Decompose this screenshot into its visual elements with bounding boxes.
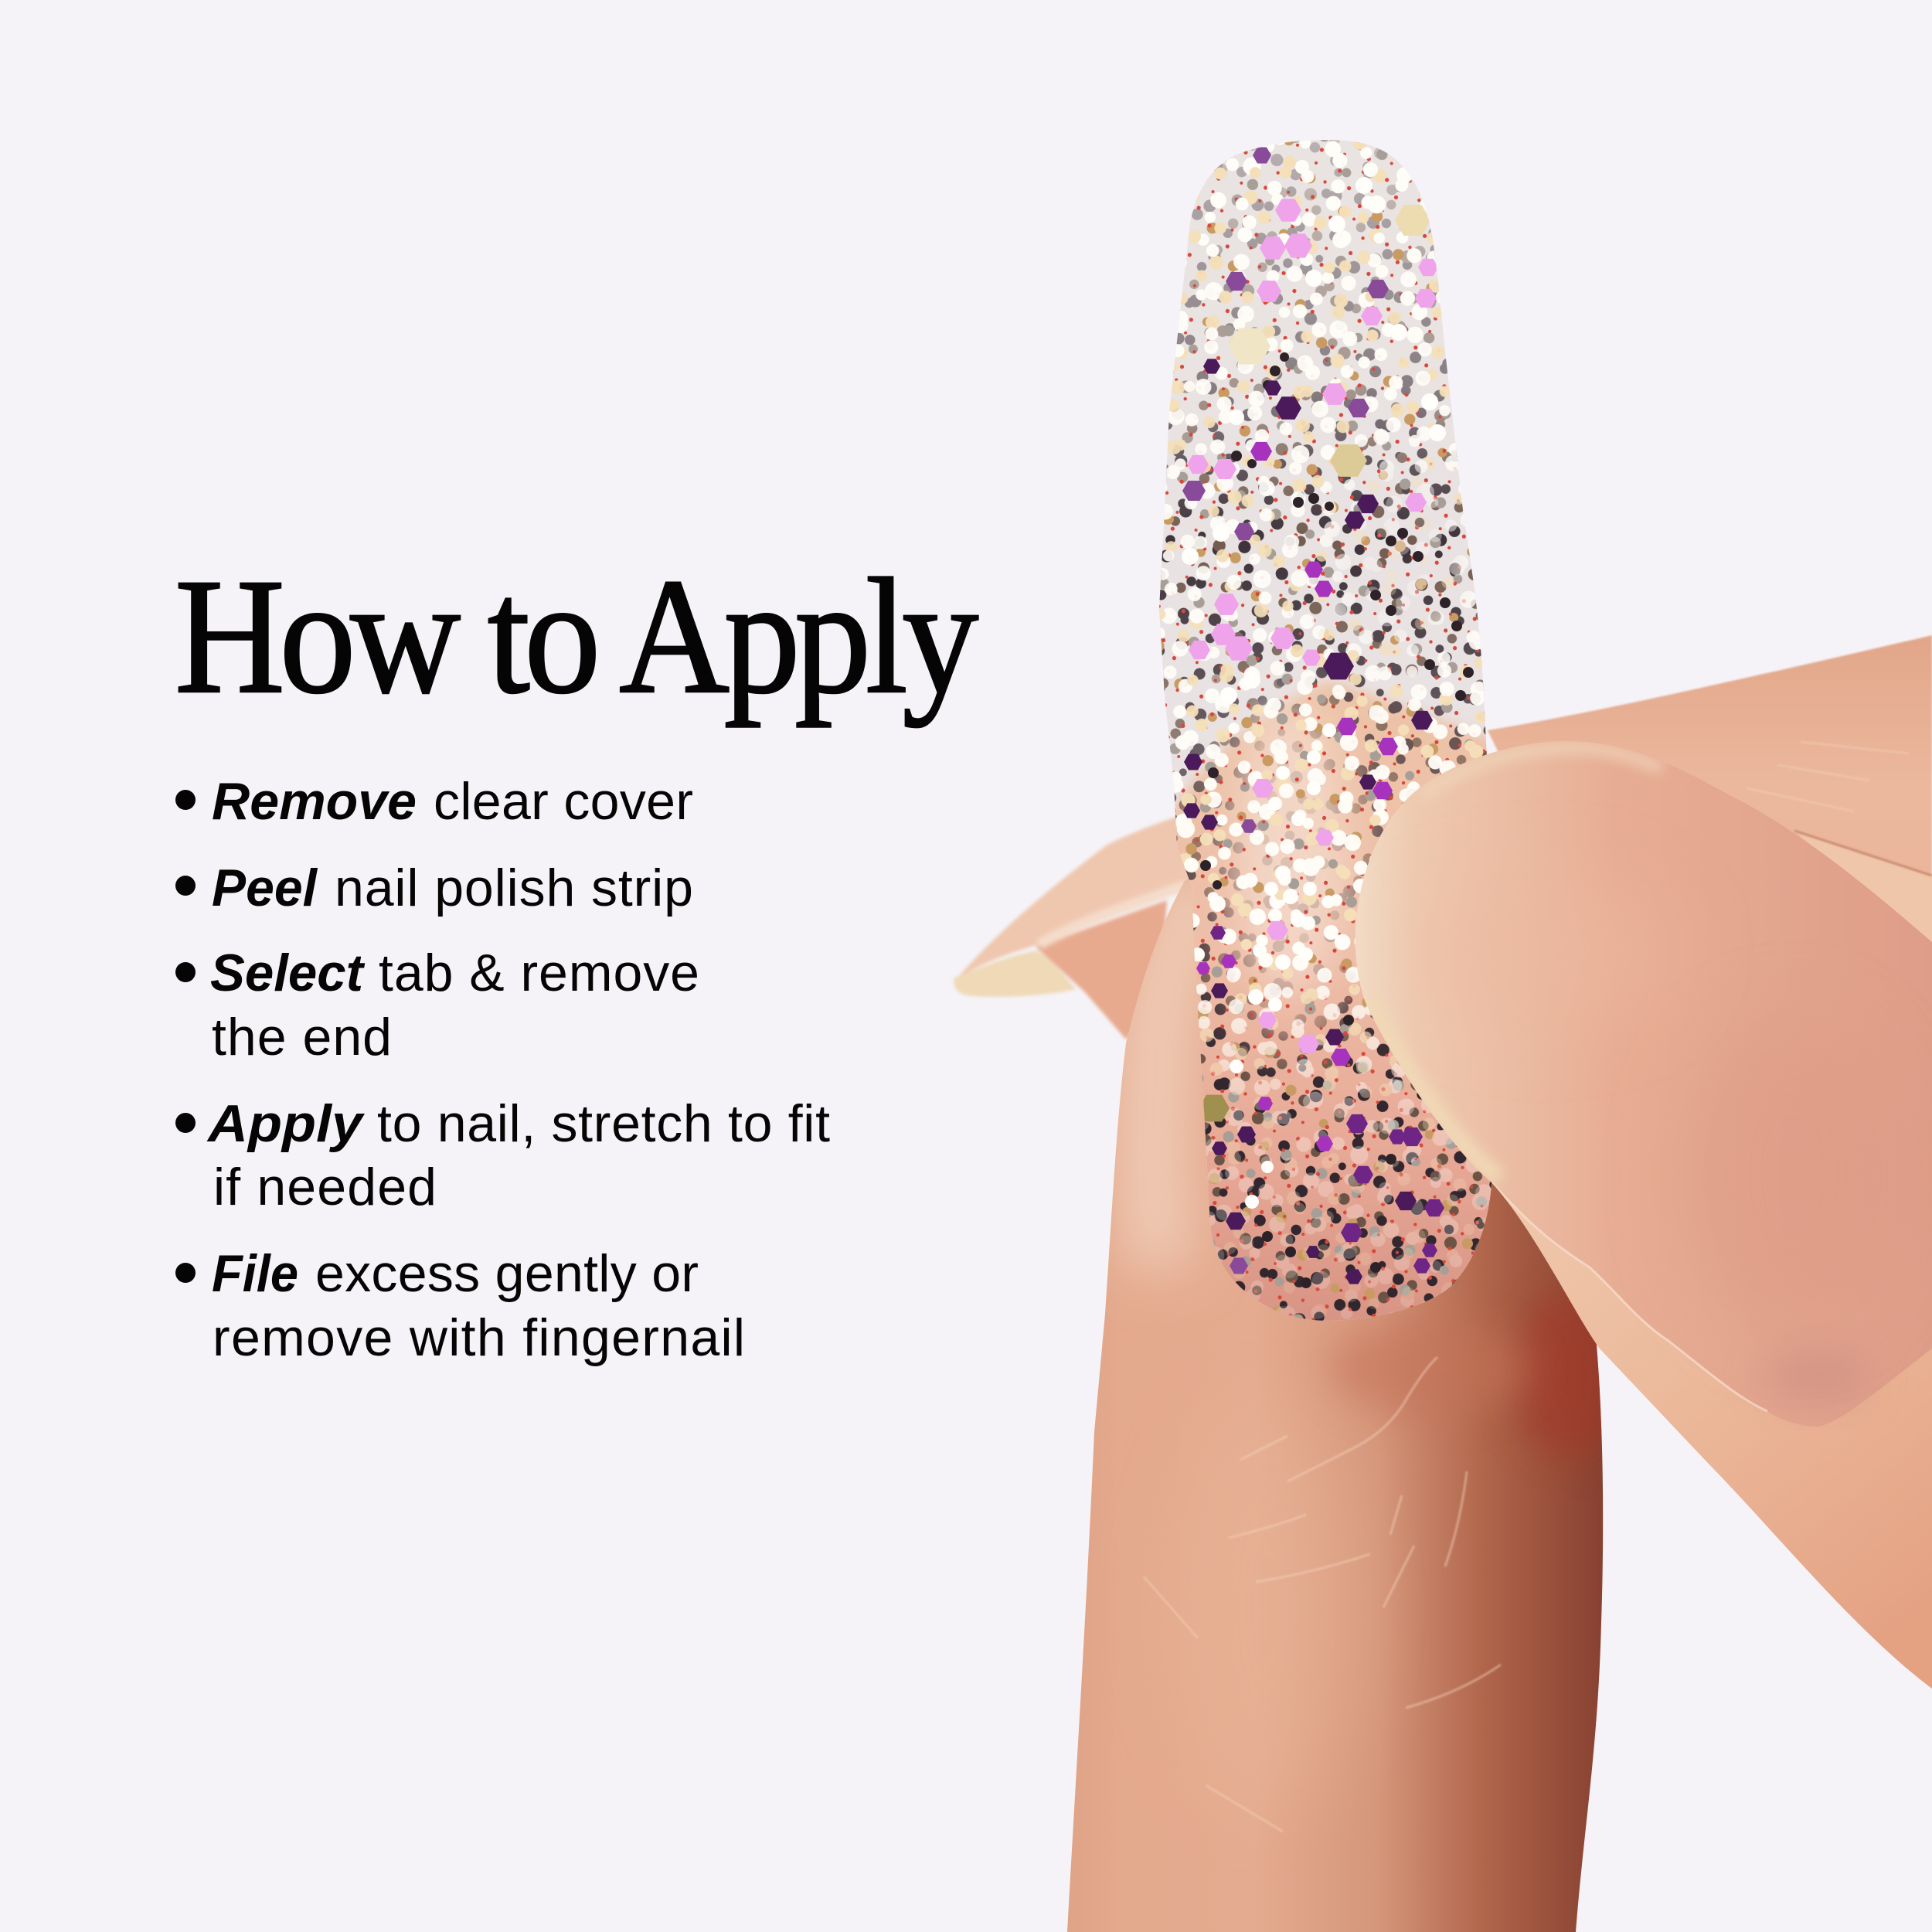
- glitter dots: [1151, 131, 1499, 1329]
- back finger with nail tip: [954, 815, 1194, 1039]
- step: file excess: excess gently or: [315, 1244, 699, 1303]
- large glitter pieces: [1187, 199, 1438, 1053]
- step: apply to nail: [175, 1094, 830, 1216]
- instruction list: [175, 772, 830, 1367]
- thumb: [1355, 741, 1932, 1700]
- step: file excess: remove with fingernail: [213, 1308, 745, 1367]
- step: peel nail polish strip: [175, 859, 693, 917]
- thumbnail pink lunula: [1776, 1354, 1851, 1399]
- step: peel nail polish strip: nail polish strip: [335, 859, 693, 917]
- top finger: [1488, 635, 1932, 954]
- step: remove clear cover: Remove: [212, 772, 417, 831]
- step: apply to nail: Apply: [206, 1094, 365, 1153]
- step: file excess: [175, 1244, 745, 1367]
- strip base: [1151, 131, 1499, 1329]
- heading: How to Apply: How to Apply: [175, 544, 978, 728]
- photo: fingers holding glitter strip: [954, 131, 1932, 1932]
- step: apply to nail: to nail, stretch to fit: [377, 1094, 830, 1153]
- natural nail underneath: [1175, 675, 1492, 1321]
- skin below thumbnail: [1492, 1182, 1932, 1700]
- step: remove clear cover: [175, 772, 693, 831]
- step: select tab and remove the end: the end: [212, 1008, 392, 1066]
- bright sparkle clusters: [1182, 177, 1446, 1209]
- step: select tab and remove the end: [175, 944, 699, 1066]
- index finger: [1067, 850, 1623, 1932]
- step: apply to nail: if needed: [213, 1158, 437, 1216]
- step: file excess: File: [212, 1244, 298, 1303]
- dark glitter clusters: [1200, 352, 1474, 1288]
- step: select tab and remove the end: Select: [210, 944, 365, 1002]
- step: remove clear cover: clear cover: [434, 772, 693, 831]
- glitter nail strip: [1151, 131, 1503, 1333]
- step: peel nail polish strip: Peel: [212, 859, 318, 917]
- thumb fingertip highlight: [1368, 997, 1499, 1179]
- step: select tab and remove the end: tab & remove: [379, 944, 699, 1002]
